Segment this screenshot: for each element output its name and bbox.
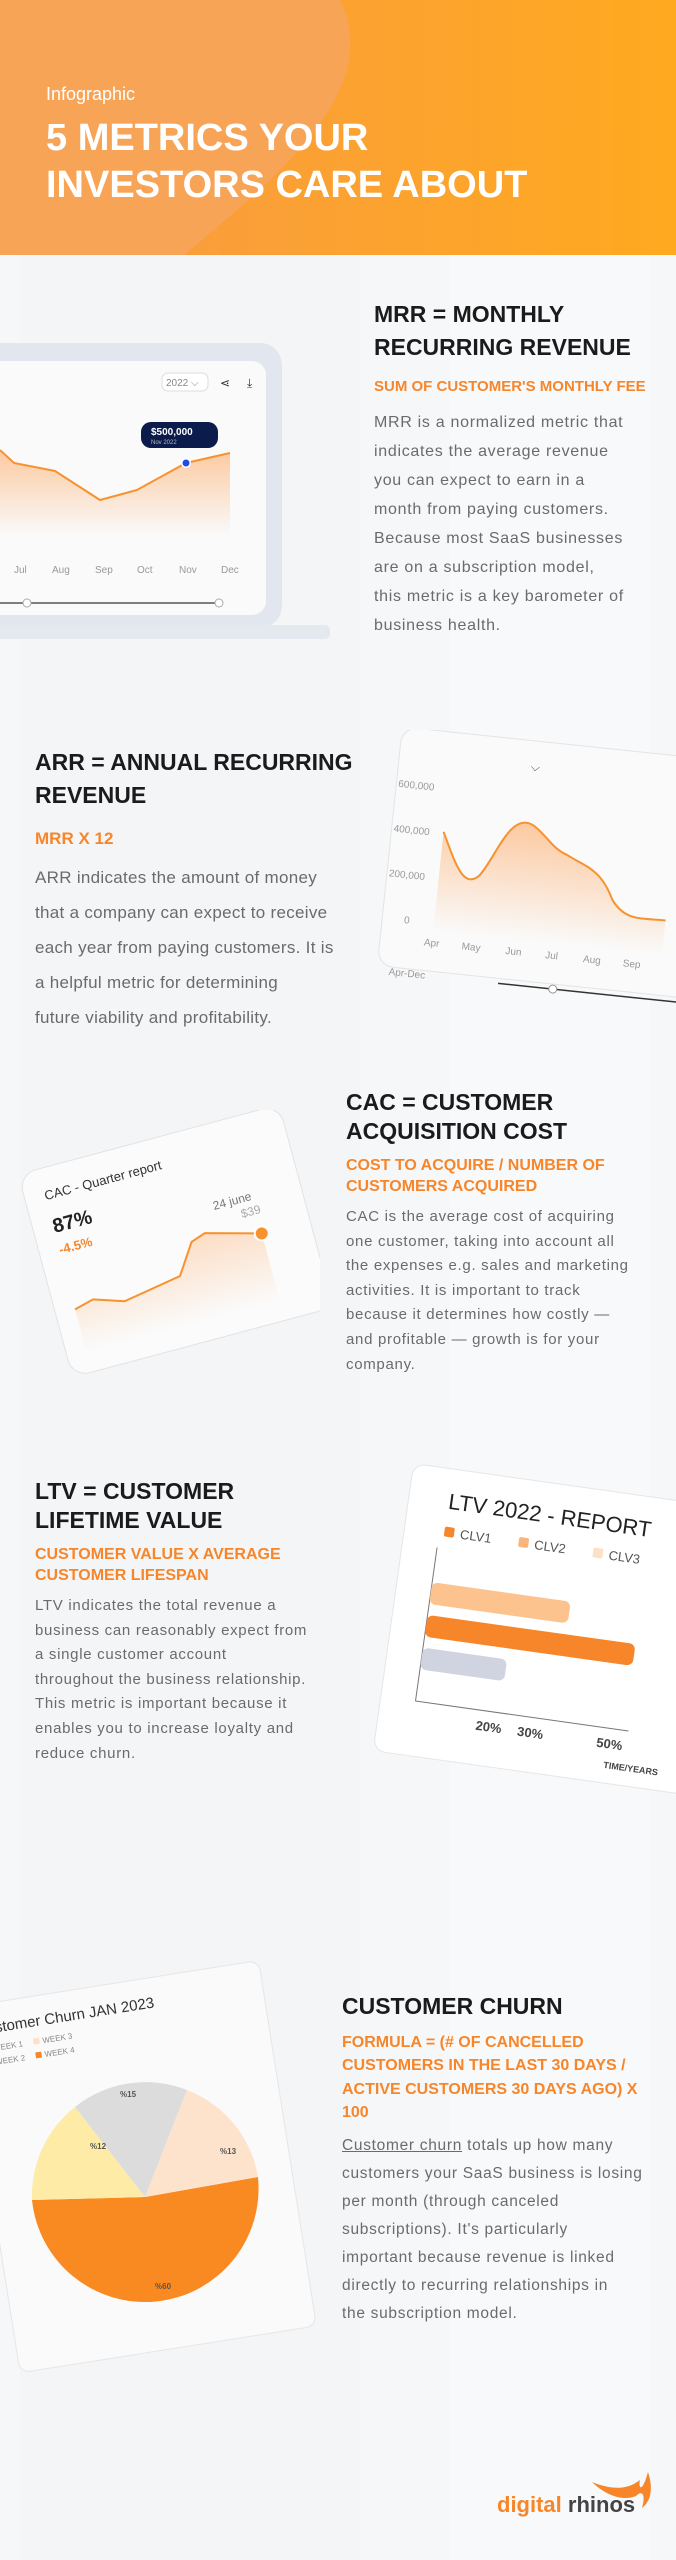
body: ARR: that a company can expect to receive [35,903,327,922]
heading: LTV: LIFETIME VALUE [35,1507,222,1533]
body: ARR: future viability and profitability. [35,1008,272,1027]
panel: churn pie chart card: %12 [90,2142,107,2151]
panel: ARR chart card: 400,000 [393,824,431,838]
body: LTV: reduce churn. [35,1745,136,1762]
body: churn: subscriptions). It's particularly [342,2221,568,2238]
body: churn: customers your SaaS business is losing [342,2165,643,2182]
body: churn: the subscription model. [342,2305,518,2322]
body: MRR: month from paying customers. [374,501,609,518]
heading: MRR [374,301,631,360]
panel: LTV bar chart card: CLV3 [608,1548,641,1567]
body: LTV: This metric is important because it [35,1695,287,1712]
panel: ARR chart card: Jun [505,946,522,959]
panel: MRR chart laptop: Dec [221,565,239,576]
body: MRR: MRR is a normalized metric that [374,414,623,431]
panel: MRR chart laptop: Oct [137,565,153,576]
body: CAC: company. [346,1356,416,1373]
heading: ARR [35,749,353,808]
formula: churn: FORMULA = (# OF CANCELLED [342,2034,584,2051]
body: churn: directly to recurring relationships in [342,2277,608,2294]
panel: CAC chart card: -4.5% [57,1234,94,1257]
body: CAC: the expenses e.g. sales and marketing [346,1257,629,1274]
formula: LTV: CUSTOMER VALUE X AVERAGE [35,1546,281,1563]
panel: ARR chart card: Sep [622,958,641,971]
heading: churn: CUSTOMER CHURN [342,1993,563,2019]
heading: ARR: REVENUE [35,782,146,808]
panel: MRR chart laptop: Nov 2022 [151,440,177,446]
panel: ARR chart card: Aug [582,954,601,967]
body: LTV: LTV indicates the total revenue a [35,1597,276,1614]
panel: churn pie chart card: %13 [220,2147,237,2156]
heading: LTV: LTV = CUSTOMER [35,1478,234,1504]
panel: churn pie chart card: %15 [120,2090,137,2099]
body: ARR: ARR indicates the amount of money [35,868,317,887]
body: churn: Customer churn totals up how many [342,2137,613,2154]
body: LTV: a single customer account [35,1646,227,1663]
formula: CAC: COST TO ACQUIRE / NUMBER OF [346,1157,605,1174]
panel: MRR chart laptop: Jul [14,565,27,576]
heading: CAC: ACQUISITION COST [346,1118,567,1144]
text block: LTV [35,1478,307,1762]
text block: MRR [374,301,646,634]
text block: ARR [35,749,353,1027]
panel: MRR chart laptop: Nov [179,565,197,576]
panel: churn pie chart card: WEEK 4 [44,2045,76,2059]
panel: ARR chart card: ⌵ [530,760,541,774]
panel: ARR chart card: 200,000 [388,868,426,883]
body: LTV: business can reasonably expect from [35,1622,307,1639]
header banner [0,0,676,255]
body: MRR: are on a subscription model, [374,559,595,576]
panel: churn pie chart card [0,1962,316,2372]
panel: churn pie chart card: WEEK 3 [42,2031,74,2045]
title [46,117,527,206]
panel: MRR chart laptop [0,343,330,639]
panel: churn pie chart card: %60 [155,2282,172,2291]
formula: MRR: SUM OF CUSTOMER'S MONTHLY FEE [374,378,646,395]
body: LTV: enables you to increase loyalty and [35,1720,294,1737]
panel: LTV bar chart card: TIME/YEARS [603,1760,659,1777]
body: churn [342,2137,643,2322]
body: MRR: this metric is a key barometer of [374,588,624,605]
panel: ARR chart card: Jul [545,950,558,962]
panel: ARR chart card: Apr [423,937,441,950]
body: CAC: because it determines how costly — [346,1306,610,1323]
title: 5 METRICS YOUR [46,117,368,159]
panel: CAC chart card: 87% [50,1206,95,1238]
panel: MRR chart laptop: ⤓ [247,376,253,390]
logo: digital rhinos: digital rhinos [497,2492,635,2517]
body: MRR [374,414,624,634]
body: CAC: one customer, taking into account all [346,1233,615,1250]
body: ARR [35,868,334,1027]
panel: LTV bar chart card: CLV1 [459,1527,492,1546]
formula: churn: CUSTOMERS IN THE LAST 30 DAYS / [342,2057,626,2074]
body: LTV: throughout the business relationship. [35,1671,306,1688]
panel: LTV bar chart card: 20% [475,1718,503,1736]
heading: CAC: CAC = CUSTOMER [346,1089,553,1115]
panel: MRR chart laptop: Aug [52,565,70,576]
body: CAC: and profitable — growth is for your [346,1331,600,1348]
heading: MRR: MRR = MONTHLY [374,301,564,327]
panel: MRR chart laptop: ⋖ [220,376,230,390]
formula: CAC [346,1157,605,1195]
heading: ARR: ARR = ANNUAL RECURRING [35,749,353,775]
formula: CAC: CUSTOMERS ACQUIRED [346,1178,537,1195]
body: CAC [346,1208,629,1373]
body: MRR: business health. [374,617,501,634]
panel: LTV bar chart card: 50% [595,1735,624,1753]
panel: CAC chart card: CAC - Quarter report [43,1157,163,1203]
panel: ARR chart card: 0 [403,915,411,927]
body: churn: per month (through canceled [342,2193,559,2210]
panel: CAC chart card [22,1110,320,1374]
text block: churn [342,1993,643,2322]
panel: ARR chart card: Apr-Dec [388,967,426,982]
heading: MRR: RECURRING REVENUE [374,334,631,360]
body: churn: important because revenue is linked [342,2249,615,2266]
formula: churn: ACTIVE CUSTOMERS 30 DAYS AGO) X [342,2081,637,2098]
body: LTV [35,1597,307,1762]
panel: LTV bar chart card: 30% [516,1724,545,1742]
body: ARR: a helpful metric for determining [35,973,278,992]
body: MRR: you can expect to earn in a [374,472,585,489]
body: CAC: activities. It is important to track [346,1282,580,1299]
panel: CAC chart card: $39 [239,1202,263,1221]
panel: ARR chart card: 600,000 [398,779,435,794]
panel: LTV bar chart card [374,1464,676,1794]
body: MRR: Because most SaaS businesses [374,530,623,547]
formula: LTV: CUSTOMER LIFESPAN [35,1567,209,1584]
heading: LTV [35,1478,234,1533]
text block: CAC [346,1089,629,1373]
panel: LTV bar chart card: LTV 2022 - REPORT [447,1489,653,1542]
formula: churn [342,2034,638,2121]
panel: MRR chart laptop: $500,000 [151,427,193,438]
formula: ARR: MRR X 12 [35,829,113,848]
formula: churn: 100 [342,2104,369,2121]
title: INVESTORS CARE ABOUT [46,164,527,206]
logo: digital rhinos [497,2472,651,2517]
panel: MRR chart laptop: Sep [95,565,113,576]
panel: LTV bar chart card: CLV2 [533,1537,567,1556]
panel: ARR chart card: May [461,941,481,954]
subtitle: Infographic: Infographic [46,84,135,104]
panel: MRR chart laptop: 2022 ⌵ [166,378,199,389]
body: CAC: CAC is the average cost of acquiring [346,1208,615,1225]
panel: CAC chart card: 24 june [211,1189,253,1213]
body: ARR: each year from paying customers. It is [35,938,334,957]
heading: CAC [346,1089,567,1144]
panel: ARR chart card [378,730,676,1003]
body: MRR: indicates the average revenue [374,443,609,460]
formula: LTV [35,1546,281,1584]
